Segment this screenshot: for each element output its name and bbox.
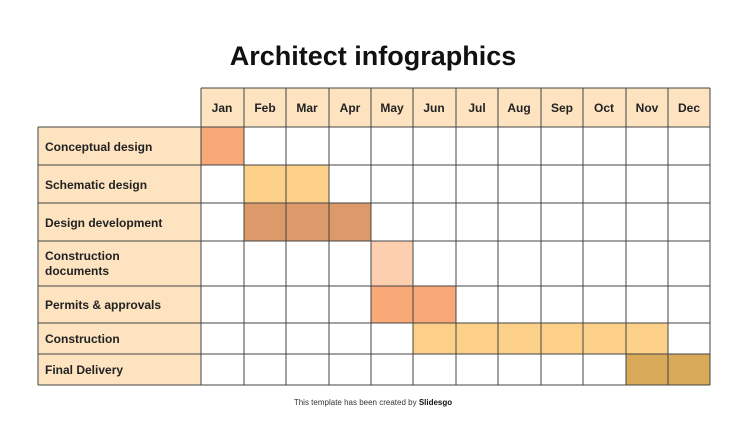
header row: months: Sep [551, 101, 573, 115]
task labels [38, 127, 201, 385]
header row: months: Aug [507, 101, 531, 115]
header row: months: Jun [423, 101, 445, 115]
task labels: Construction [45, 249, 120, 263]
header row: months: Apr [340, 101, 361, 115]
task labels: Conceptual design [45, 140, 152, 154]
header row: months: Jan [212, 101, 232, 115]
footer credit: This template has been created by Slidesgo [294, 398, 452, 407]
header row: months: Mar [296, 101, 318, 115]
header row: months: May [380, 101, 404, 115]
gantt bars [201, 127, 710, 385]
header row: months: Nov [636, 101, 659, 115]
title: Architect infographics [230, 41, 516, 71]
header row: months: Oct [594, 101, 614, 115]
task labels: Final Delivery [45, 363, 123, 377]
task labels: Schematic design [45, 178, 147, 192]
task labels: Construction [45, 332, 120, 346]
header row: months [201, 88, 710, 127]
header row: months: Dec [678, 101, 700, 115]
task labels: Permits & approvals [45, 298, 161, 312]
task labels: documents [45, 264, 109, 278]
task labels: Design development [45, 216, 162, 230]
header row: months: Feb [254, 101, 276, 115]
header row: months: Jul [468, 101, 486, 115]
